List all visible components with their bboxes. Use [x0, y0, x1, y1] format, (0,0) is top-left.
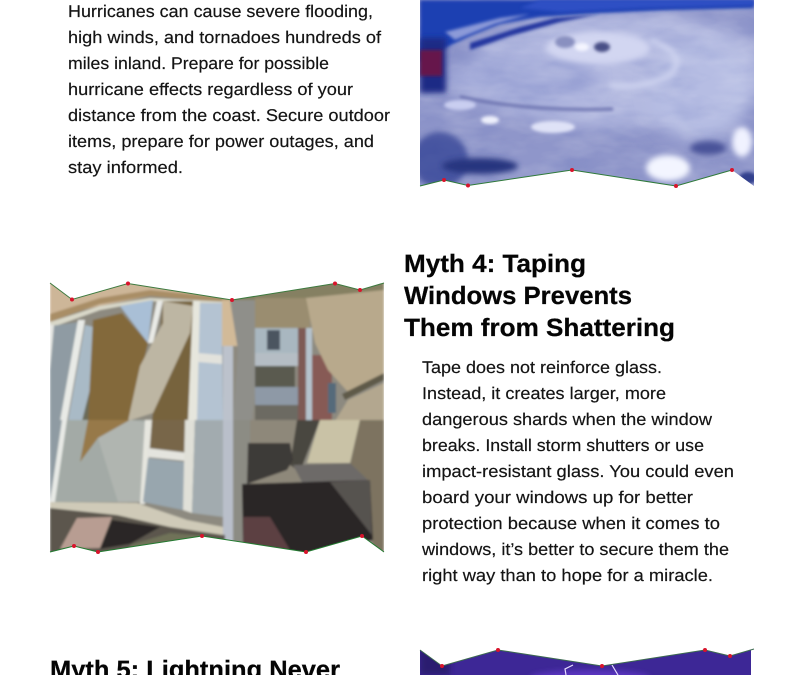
text block: myth 4 body: breaks. Install storm shutters or use: [422, 436, 704, 455]
text block: myth 3 body: distance from the coast. Secure outdoor: [68, 106, 390, 125]
text block: myth 3 body: items, prepare for power outages, and: [68, 132, 374, 151]
text block: myth 3 body: hurricane effects regardless of your: [68, 80, 353, 99]
text block: myth 3 body: high winds, and tornadoes hundreds of: [68, 28, 381, 47]
text block: myth 4 body: dangerous shards when the window: [422, 410, 713, 429]
heading: myth 4: Them from Shattering: [404, 314, 675, 342]
text block: myth 4 body: right way than to hope for a miracle.: [422, 566, 713, 585]
text block: myth 4 body: Instead, it creates larger, more: [422, 384, 666, 403]
heading: myth 4: Myth 4: Taping: [404, 250, 586, 278]
text block: myth 4 body: board your windows up for better: [422, 488, 693, 507]
text block: myth 4 body: [421, 358, 734, 585]
photo: hurricane from space: [412, 0, 770, 190]
heading: myth 4: Windows Prevents: [404, 282, 632, 310]
text block: myth 3 body: Hurricanes can cause severe flooding,: [68, 2, 373, 21]
text block: myth 4 body: impact-resistant glass. You could even: [422, 462, 734, 481]
heading: myth 4: [404, 250, 675, 342]
photo: lightning storm: [420, 645, 754, 675]
text block: myth 4 body: windows, it’s better to secure them the: [421, 540, 729, 559]
text block: myth 4 body: Tape does not reinforce glass.: [422, 358, 662, 377]
photo: shattered window with curtains: [50, 280, 384, 555]
text block: myth 3 body: miles inland. Prepare for possible: [68, 54, 329, 73]
text block: myth 3 body: [68, 2, 390, 177]
text block: myth 3 body: stay informed.: [68, 158, 183, 177]
text block: myth 4 body: protection because when it comes to: [422, 514, 720, 533]
